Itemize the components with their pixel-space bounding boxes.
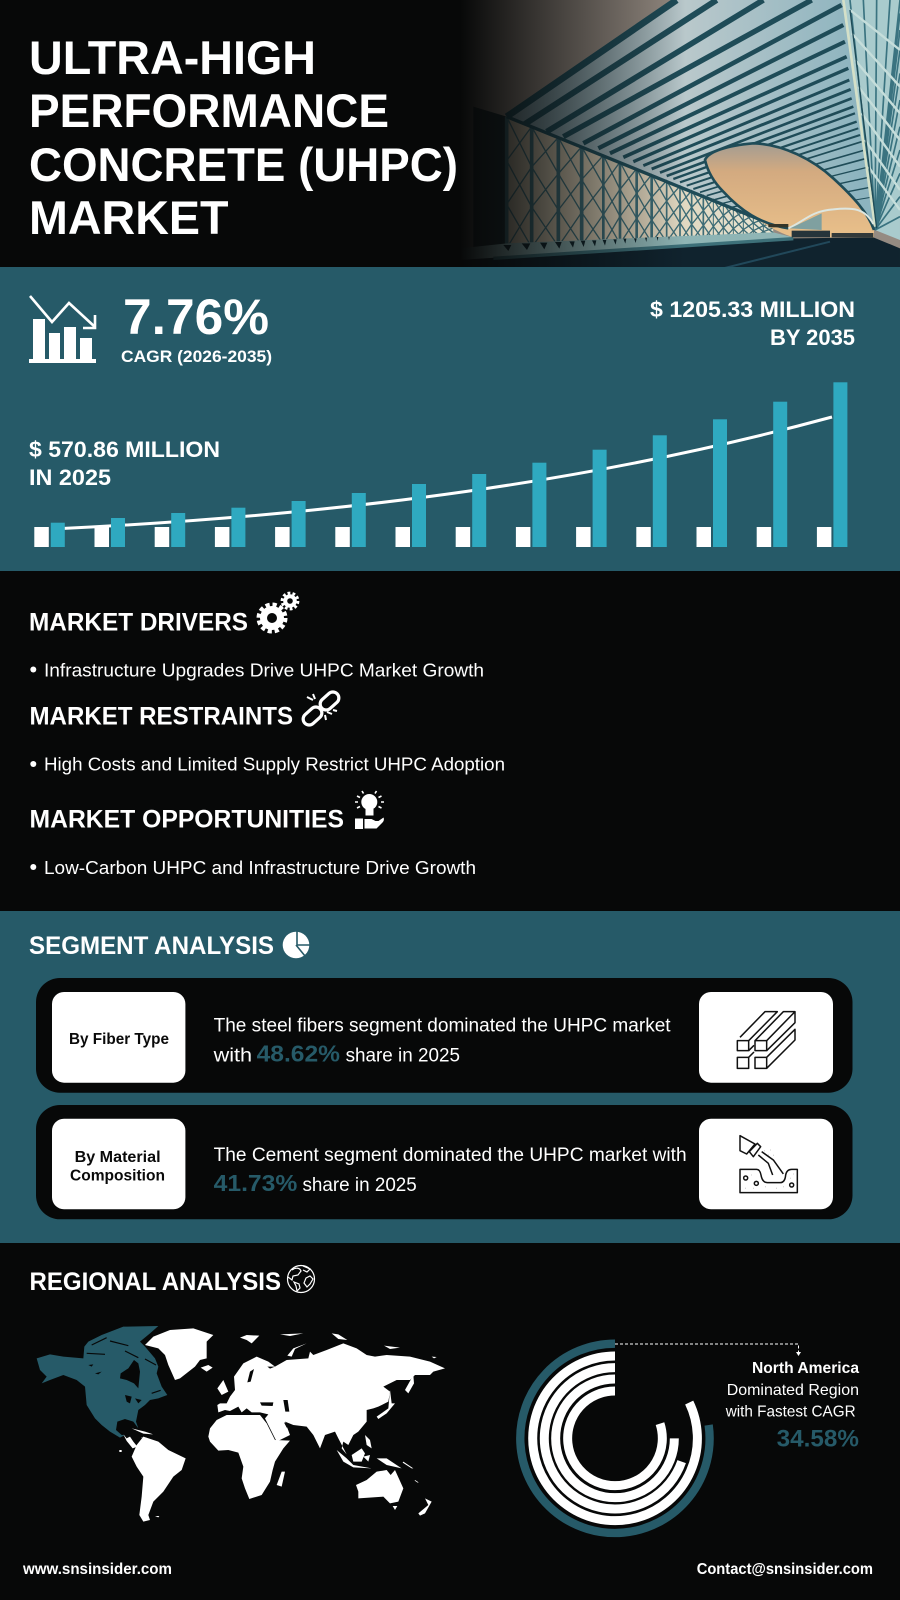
panel: market size forecast [0,267,900,571]
card: by material composition [36,1105,852,1219]
label box: Composition [70,1168,165,1185]
title: MARKET [29,191,229,244]
2025 market value: $ 570.86 MILLION [29,437,220,462]
landmasses: South America, Africa, Oceania [132,1415,432,1522]
card: by fiber type [36,978,852,1093]
panel: regional analysis [30,1266,859,1533]
opportunity bullet: Low-Carbon UHPC and Infrastructure Drive Growth [44,858,476,878]
landmasses: Eurasia [217,1333,445,1454]
icon box: cement pour [699,1119,833,1209]
icon: globe [288,1266,314,1292]
footer website: www.snsinsider.com [22,1561,172,1578]
description [212,1016,671,1067]
footer contact: Contact@snsinsider.com [697,1561,873,1578]
header photo: bridge [460,0,900,270]
label box: By Material [75,1149,161,1166]
regional callout: North America [752,1360,859,1377]
description: share in 2025 [346,1046,460,1067]
bar chart with growth curve [34,382,847,547]
regional callout: Dominated Region [727,1382,859,1399]
heading: segment analysis: SEGMENT ANALYSIS [29,932,274,960]
icon box: steel bars [699,992,833,1083]
description: share in 2025 [302,1175,417,1196]
title: ULTRA-HIGH [29,31,316,84]
title [29,31,458,244]
icon: bulb in hand [355,791,384,829]
dashed leader arrow [615,1344,801,1356]
regional callout: 34.58% [777,1426,859,1453]
title: PERFORMANCE [29,84,389,137]
label box: By Fiber Type [69,1031,169,1048]
icon: broken chain [301,690,341,727]
restraint bullet: High Costs and Limited Supply Restrict UHPC Adoption [44,755,505,775]
panel: segment analysis [0,911,900,1243]
description: The Cement segment dominated the UHPC market with [214,1145,687,1166]
driver bullet: Infrastructure Upgrades Drive UHPC Market Growth [44,661,484,681]
2025 market value [29,437,220,490]
panel: market dynamics [29,593,505,878]
description: with [212,1046,252,1067]
description: The steel fibers segment dominated the UHPC market [214,1016,671,1037]
icon: pie chart [283,931,310,958]
landmasses: Greenland and Central America [119,1328,213,1452]
description: 41.73% [214,1170,297,1196]
2035 market value: BY 2035 [770,325,855,350]
2025 market value: IN 2025 [29,465,111,490]
label box [52,1119,185,1209]
region: North America [37,1326,167,1438]
title: CONCRETE (UHPC) [29,138,458,191]
radial bar chart [520,1344,710,1533]
description [214,1145,687,1196]
2035 market value [650,297,855,350]
2035 market value: $ 1205.33 MILLION [650,297,855,322]
heading: market drivers: MARKET DRIVERS [29,609,248,637]
CAGR value: 7.76% [123,289,269,345]
regional callout: with Fastest CAGR [725,1404,856,1421]
heading: regional analysis: REGIONAL ANALYSIS [30,1268,281,1296]
regional callout [725,1360,859,1453]
heading: market opportunities: MARKET OPPORTUNITIES [30,806,344,834]
label box [52,992,185,1083]
description: 48.62% [257,1041,340,1067]
icon: declining line over bar chart [29,296,96,363]
heading: market restraints: MARKET RESTRAINTS [30,702,293,730]
world map [37,1326,445,1522]
inland seas [247,1367,293,1428]
icon: gears [258,593,298,632]
CAGR label: CAGR (2026-2035) [121,347,272,366]
